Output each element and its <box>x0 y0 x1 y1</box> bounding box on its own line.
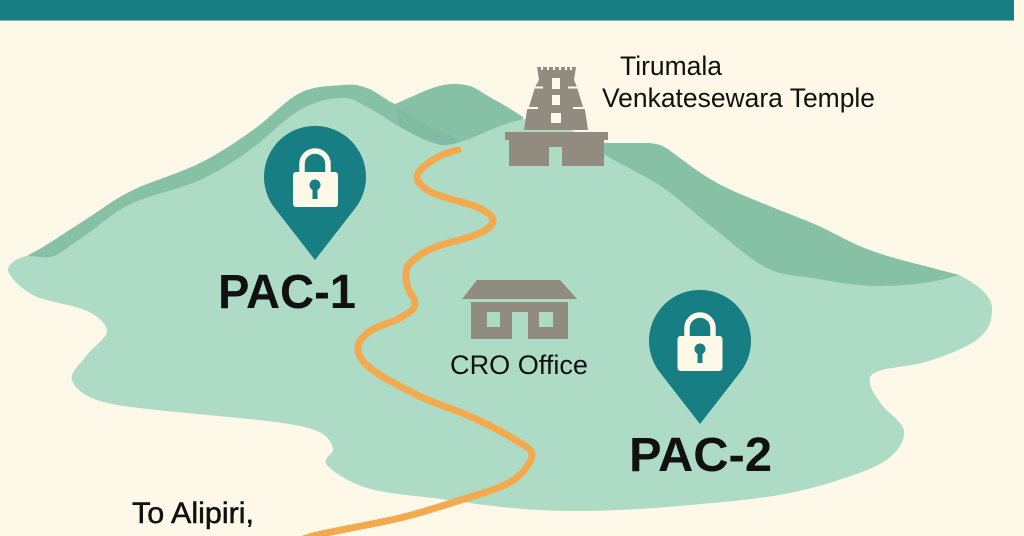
winding road <box>290 150 532 536</box>
label: temple: Venkatesewara Temple <box>602 83 875 113</box>
icon: temple <box>505 67 608 166</box>
back ridge: valley shadow <box>396 107 460 150</box>
label: PAC-1: PAC-1 <box>218 266 356 319</box>
header bar <box>0 0 1014 21</box>
main hill <box>8 98 992 511</box>
back ridge: right slope <box>600 143 962 300</box>
label: PAC-2: PAC-2 <box>629 429 772 482</box>
label: temple: Tirumala <box>620 51 722 81</box>
label: CRO Office: CRO Office <box>450 350 588 380</box>
label: To Alipiri: To Alipiri, <box>132 497 254 530</box>
icon: office building <box>462 280 577 339</box>
icon: location pin PAC-2 <box>649 290 751 424</box>
label: temple <box>602 51 875 113</box>
back ridge: left hills <box>28 84 523 280</box>
icon: location pin PAC-1 <box>264 126 366 260</box>
